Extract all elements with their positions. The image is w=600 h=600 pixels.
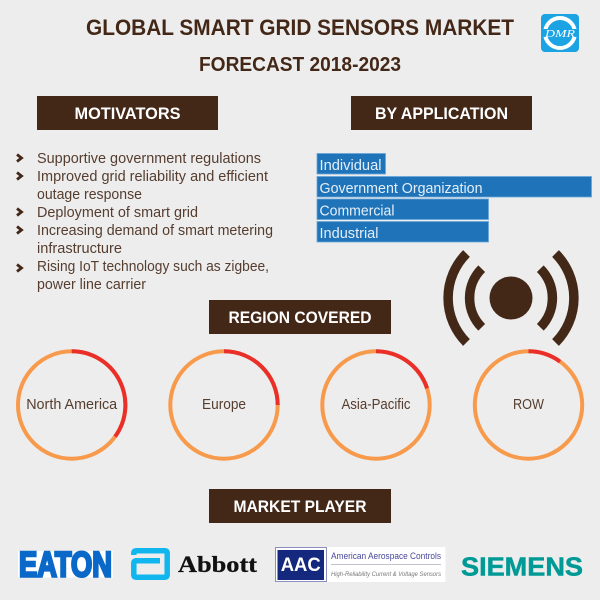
icon: DMR logo [541,14,579,52]
bar: industrial: Industrial [320,226,378,242]
heading: market player: MARKET PLAYER [234,497,366,516]
logo: american aerospace controls: AAC [281,555,321,576]
list text: Deployment of smart grid [37,204,198,221]
heading: region covered: REGION COVERED [228,308,372,327]
donut: asia-pacific [322,351,430,459]
donut: north america: North America [26,396,118,413]
logo: abbott: Abbott [178,552,257,578]
list text: Improved grid reliability and efficient [37,168,269,185]
heading: by application [351,96,532,130]
logo: eaton: EATON [19,546,112,584]
title: FORECAST 2018-2023 [199,54,401,76]
heading: by application: BY APPLICATION [375,104,508,123]
bar: individual: Individual [320,158,382,174]
list text: power line carrier [37,276,146,293]
bar: government organization: Government Organization [320,181,482,197]
logo: abbott [134,551,257,578]
donut: row: ROW [513,396,545,413]
title: GLOBAL SMART GRID SENSORS MARKET [86,15,515,40]
bar chart: by application [317,154,592,242]
list text: Rising IoT technology such as zigbee, [37,258,269,275]
donut: europe [170,351,278,459]
donut: asia-pacific: Asia-Pacific [342,396,411,413]
list text: Increasing demand of smart metering [37,222,273,239]
icon: sensor signal [448,254,574,342]
bullet icons [17,154,22,272]
bar: government organization [317,176,592,197]
logo: siemens: SIEMENS [461,552,583,582]
list text [37,150,273,293]
donut: north america [18,351,125,459]
logo: american aerospace controls: High-Reliability Current & Voltage Sensors [331,572,441,578]
title [86,15,515,76]
heading: region covered [209,300,391,334]
heading: motivators [37,96,218,130]
donut: row [475,351,582,459]
logo: american aerospace controls: American Aerospace Controls [331,551,441,561]
bar: industrial [317,222,488,242]
icon: DMR logo: DMR [544,28,575,40]
panel: motivators list [17,150,273,293]
list text: Supportive government regulations [37,150,261,167]
heading: motivators: MOTIVATORS [74,104,180,123]
heading: market player [209,489,391,523]
bar: commercial [317,199,488,220]
donut: europe: Europe [202,396,246,413]
list text: infrastructure [37,240,122,257]
bar: individual [317,154,386,174]
bar: commercial: Commercial [320,204,394,220]
logo: american aerospace controls [275,547,446,582]
list text: outage response [37,186,142,203]
